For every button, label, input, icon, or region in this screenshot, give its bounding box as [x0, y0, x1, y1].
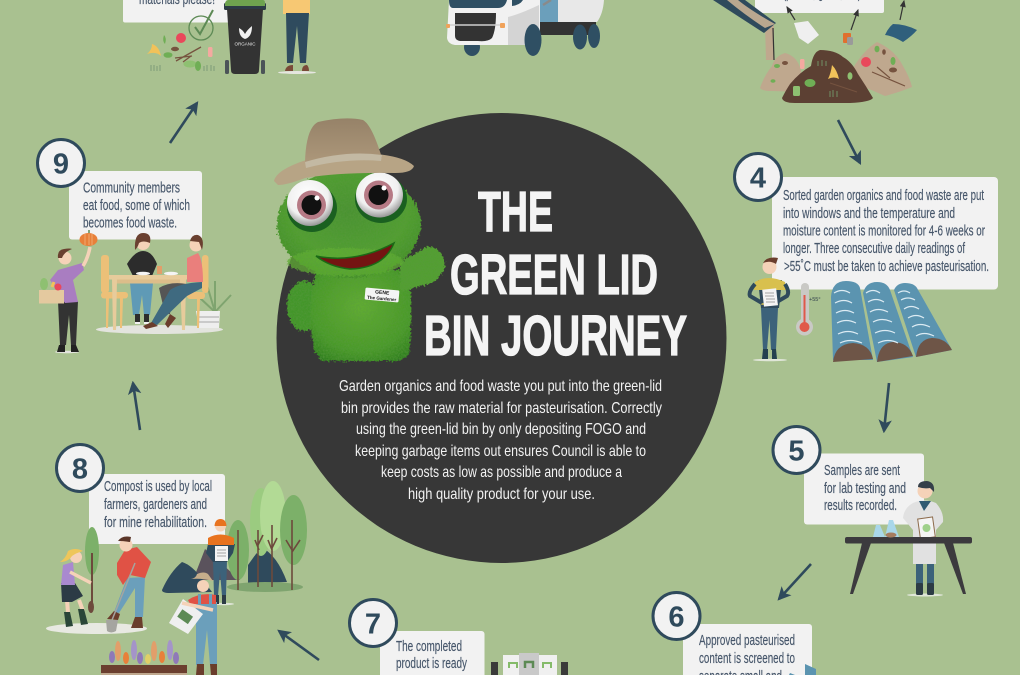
- number badge: 5: [773, 426, 820, 474]
- icon: flasks: [873, 520, 899, 538]
- text block: introduction: keeping garbage items out ensures Council is able to: [355, 443, 646, 460]
- step 7 callout: The completed: [396, 639, 462, 655]
- mascot hat: [274, 118, 414, 185]
- step 9 illustration: community eating: [39, 230, 231, 353]
- number badge: 7: 7: [365, 608, 381, 640]
- truck front wheel: [464, 38, 480, 56]
- truck cab: [447, 0, 540, 45]
- arrow: 7 to 8: [279, 631, 319, 660]
- mascot mouth: [316, 243, 394, 269]
- icon: removed can: [843, 33, 853, 45]
- text block: introduction: high quality product for your use.: [408, 486, 595, 503]
- step 9 callout: Community members: [83, 180, 180, 196]
- truck chassis: [538, 20, 596, 35]
- step 4 illustration: windrow monitoring: [750, 258, 952, 362]
- truck grille: [455, 13, 496, 41]
- icon: removed plastic container: [794, 21, 819, 44]
- text block: introduction: bin provides the raw material for pasteurisation. Correctly: [341, 400, 662, 417]
- icon: food scraps and garden organics: [147, 33, 214, 71]
- step 5 illustration: lab testing: [845, 481, 972, 596]
- icon: woman with sapling: [46, 527, 147, 634]
- step 9 callout: [69, 171, 202, 240]
- truck windscreen: [449, 0, 523, 8]
- number badge: 6: [653, 592, 700, 640]
- step 9 callout: becomes food waste.: [83, 216, 177, 232]
- icon: green lid bin: ORGANIC: [234, 42, 256, 46]
- number badge: 8: 8: [72, 454, 88, 486]
- title: BIN JOURNEY: [424, 304, 687, 368]
- step 5 callout: for lab testing and: [824, 481, 906, 497]
- step 4 person: [750, 258, 788, 361]
- step 5 callout: results recorded.: [824, 498, 897, 514]
- title: [424, 180, 687, 368]
- icon: worker with clipboard: [206, 519, 235, 605]
- icon: thermometer: +55°: [809, 297, 821, 303]
- number badge: 4: [734, 154, 782, 200]
- icon: plates and glass: [136, 266, 178, 275]
- step 1: green lid bin: [123, 0, 316, 74]
- icon: man with shovel: [106, 536, 151, 632]
- mascot: Gene the Gardener: [274, 118, 445, 361]
- panel: central dark circle: [276, 113, 726, 563]
- icon: seated woman in pink: [143, 235, 203, 329]
- mascot eyes: [287, 172, 407, 232]
- text block: introduction: keep costs as low as possible and produce a: [381, 464, 622, 481]
- mascot name badge: The Gardener: [367, 295, 397, 302]
- truck lights: [446, 24, 450, 28]
- text block: introduction: Garden organics and food waste you put into the green-lid: [339, 378, 662, 395]
- icon: signposts: [491, 662, 568, 675]
- step 4 callout: [772, 177, 998, 290]
- arrow: 9 to 1: [170, 103, 197, 143]
- truck tank: [556, 0, 604, 22]
- icon: farmer with compost bag: [169, 572, 217, 675]
- icon: conveyor: [713, 0, 776, 60]
- step 3 text box: [755, 0, 884, 13]
- icon: dark compost pile: [782, 50, 873, 103]
- arrows: contaminants removed: [787, 1, 904, 30]
- icon: man with pumpkin and groceries: [39, 230, 98, 353]
- number badge: 8: [56, 444, 104, 492]
- icon: flower bed: [101, 640, 187, 675]
- step 6 callout: content is screened to: [699, 651, 795, 667]
- mascot name badge: GENE: [375, 289, 390, 297]
- truck wheels: [524, 24, 600, 56]
- icon: chairs: [101, 255, 208, 328]
- icon: table shadow: [96, 325, 223, 334]
- title: THE: [478, 180, 553, 244]
- step 9 callout: eat food, some of which: [83, 198, 190, 214]
- step 8 callout: farmers, gardeners and: [104, 497, 207, 513]
- text block: introduction: using the green-lid bin by only depositing FOGO and: [356, 421, 646, 438]
- step 7 callout: [380, 631, 484, 675]
- number badge: 9: [38, 140, 84, 186]
- step 7 callout: product is ready: [396, 656, 468, 672]
- icon: ground: [227, 582, 303, 592]
- number badge: 9: 9: [53, 148, 69, 180]
- icon: lab table: [845, 537, 972, 594]
- icon: green lid bin: [224, 0, 266, 74]
- icon: trees: [227, 481, 307, 590]
- arrow: 5 to 6: [779, 564, 811, 599]
- step 6 callout: Approved pasteurised: [699, 633, 795, 649]
- icon: removed plastic bag: [885, 24, 917, 42]
- mascot name badge: [365, 288, 399, 302]
- icon: resident beside bin: [278, 0, 316, 74]
- step 5 callout: [804, 454, 924, 524]
- icon: scientist: [903, 481, 943, 596]
- icon: plant: [196, 281, 231, 328]
- truck side panel: [537, 0, 558, 22]
- icon: tan organics piles: [760, 42, 912, 96]
- text block: introduction: [339, 378, 662, 503]
- step 2: collection truck: [446, 0, 604, 56]
- icon: screening machine: [789, 664, 816, 675]
- icon: seated woman in black: [127, 233, 157, 324]
- arrow: 4 to 5: [884, 383, 889, 431]
- step 6 callout: [683, 624, 812, 675]
- mascot body: [277, 170, 445, 361]
- number badge: 4: 4: [750, 162, 766, 194]
- icon: correct organics tick: [189, 10, 213, 40]
- icon: compost mounds: [162, 547, 287, 593]
- arrow: 3 to 4: [838, 120, 860, 163]
- icon: dining table: [109, 275, 190, 330]
- step 8 callout: Compost is used by local: [104, 479, 212, 495]
- icon: windrows: [831, 281, 952, 362]
- step 8 illustration: compost use: [46, 481, 307, 675]
- step 1 text box: [123, 0, 233, 22]
- step 3: sorting contaminants: [713, 0, 917, 103]
- step 8 callout: for mine rehabilitation.: [104, 515, 207, 531]
- number badge: 6: 6: [668, 602, 685, 634]
- step 7 illustration: product bags: [491, 653, 568, 675]
- title: GREEN LID: [450, 243, 658, 307]
- icon: compost bags: [503, 653, 557, 675]
- icon: thermometer: [796, 283, 821, 336]
- step 8 callout: [89, 474, 225, 544]
- arrow: 8 to 9: [133, 383, 140, 430]
- number badge: 7: [350, 600, 396, 646]
- number badge: 5: 5: [788, 436, 805, 468]
- icon: items in the piles: [770, 46, 905, 97]
- step 5 callout: Samples are sent: [824, 463, 900, 479]
